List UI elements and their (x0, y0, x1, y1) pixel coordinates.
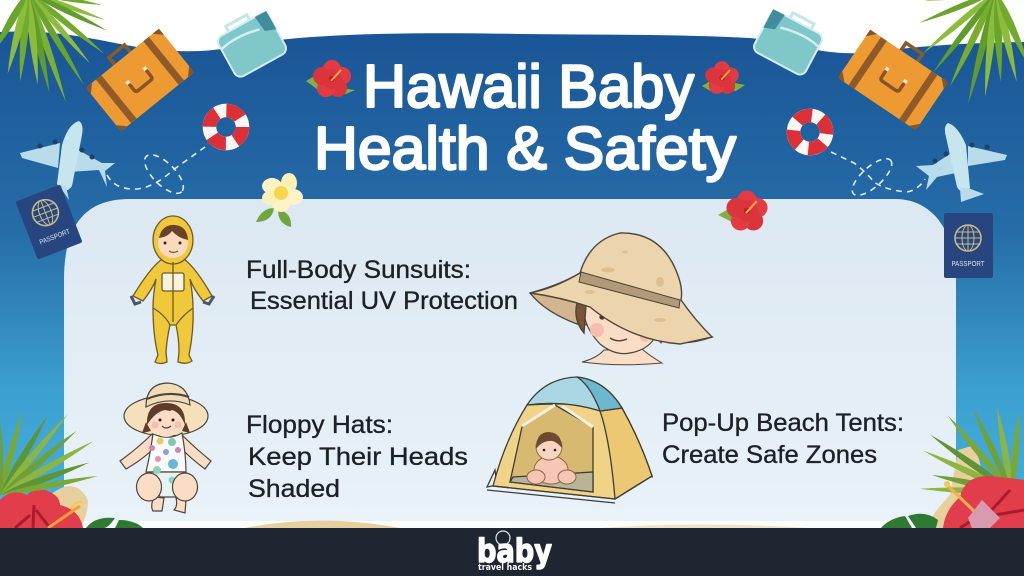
icon: life ring right (787, 109, 833, 155)
decoration: bottom left tropical corner (0, 411, 143, 528)
text: floppy hats: Shaded (248, 475, 340, 503)
title: Hawaii Baby (363, 53, 694, 120)
icon: orange suitcase right (838, 22, 953, 130)
dashed flight path right (831, 152, 925, 201)
palm: top left (0, 0, 108, 103)
icon: orange suitcase left (80, 22, 194, 131)
beach strip (64, 521, 956, 529)
text: floppy hats: Floppy Hats: (246, 411, 393, 439)
logo: baby travel hacks: baby (477, 532, 552, 570)
panel: content card (64, 199, 956, 528)
icon: passport left: PASSPORT (39, 228, 72, 246)
icon: hibiscus title left (306, 60, 355, 97)
icon: passport right (944, 213, 993, 278)
icon: airplane left (20, 121, 115, 200)
icon: teal bag left (213, 6, 289, 79)
title: Health & Safety (314, 115, 736, 182)
icon: hibiscus title right (702, 61, 745, 94)
illustration: floppy sun hat baby (530, 233, 712, 365)
text: sunsuits: Essential UV Protection (250, 287, 518, 315)
icon: passport right: PASSPORT (952, 261, 985, 268)
icon: airplane right (916, 123, 1007, 202)
logo: baby travel hacks: travel hacks (478, 563, 532, 573)
footer bar (0, 528, 1024, 576)
text: tents (662, 409, 904, 469)
illustration: baby in yellow sunsuit (131, 216, 214, 364)
decoration: bottom right tropical corner (881, 407, 1024, 528)
icon: hibiscus panel (718, 190, 768, 230)
text: floppy hats: Keep Their Heads (248, 443, 468, 471)
dashed flight path left (107, 147, 205, 199)
icon: teal bag right (752, 4, 827, 77)
illustration: baby in floppy hat and swimsuit (120, 383, 211, 513)
illustration: pop-up beach tent with baby (487, 377, 653, 503)
text: tents: Create Safe Zones (662, 441, 877, 469)
icon: passport left (15, 184, 83, 260)
icon: life ring left (210, 110, 242, 144)
text: sunsuits: Full-Body Sunsuits: (246, 256, 471, 284)
text: sunsuits (246, 256, 518, 315)
text: tents: Pop-Up Beach Tents: (662, 409, 904, 437)
palm: top right (919, 0, 1024, 104)
icon: plumeria flower (256, 173, 303, 227)
title (314, 53, 736, 182)
text: floppy hats (246, 411, 468, 503)
